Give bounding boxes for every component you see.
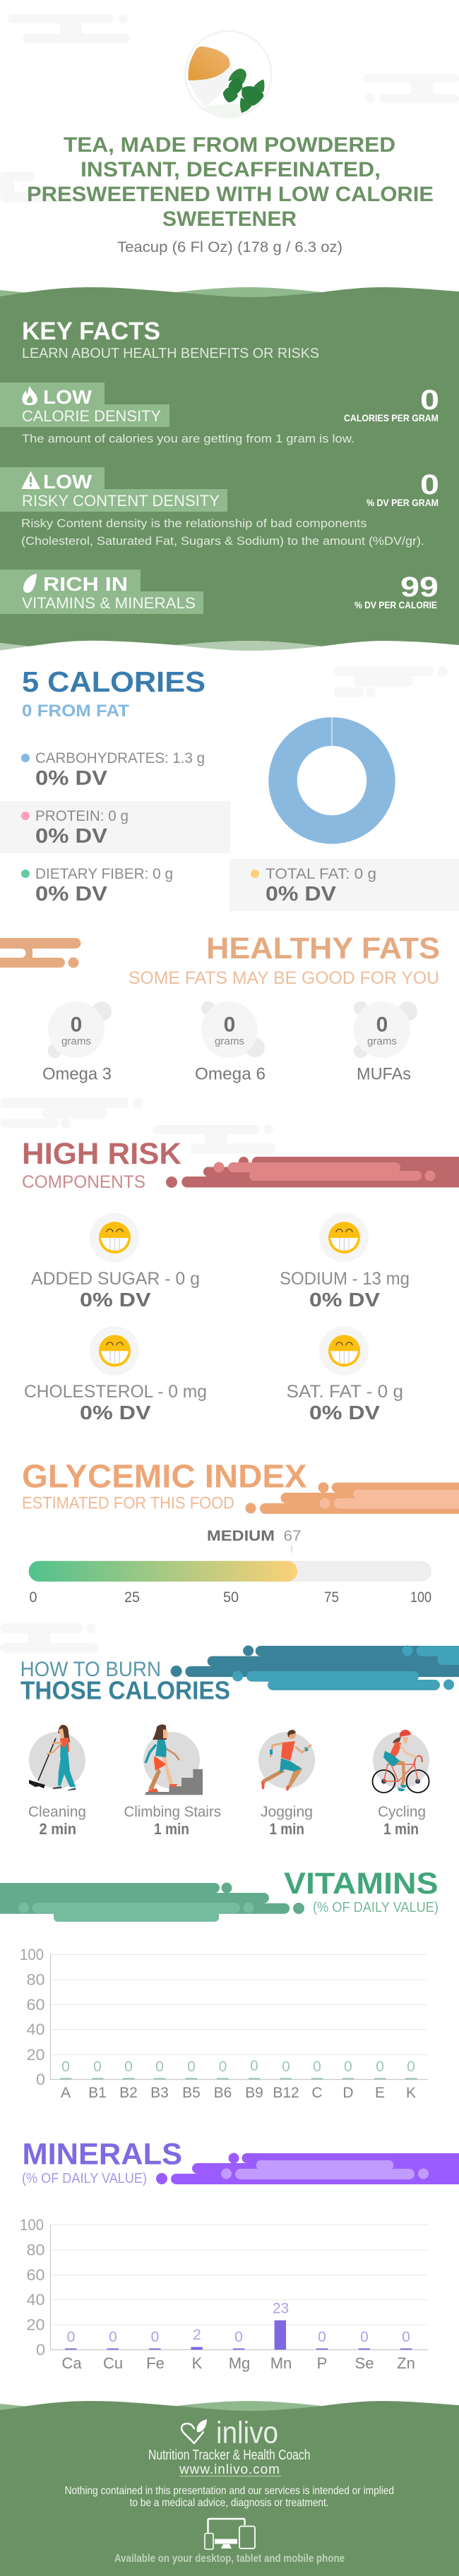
- minerals heading: [22, 2138, 459, 2186]
- macro: total fat: [230, 859, 459, 911]
- vitamins bar chart: 0: [250, 2058, 258, 2074]
- minerals bar chart: Cu: [103, 2354, 123, 2372]
- healthy fats heading: HEALTHY FATS: [206, 932, 440, 965]
- risk: cholesterol: [24, 1326, 207, 1424]
- minerals heading: (% OF DAILY VALUE): [22, 2171, 147, 2186]
- minerals bar chart: Se: [355, 2354, 374, 2372]
- vitamins heading: (% OF DAILY VALUE): [313, 1900, 439, 1915]
- mufas: [354, 1001, 417, 1084]
- vitamins bar chart: 0: [219, 2059, 227, 2075]
- high risk heading: [22, 1137, 459, 1192]
- activity: climbing stairs: Climbing Stairs: [124, 1804, 221, 1820]
- risky dv per gram value: [366, 469, 439, 508]
- vitamins bar chart: 0: [376, 2059, 384, 2075]
- glycemic index gauge: 50: [223, 1589, 239, 1606]
- key facts heading: KEY FACTS: [22, 318, 160, 345]
- glycemic index gauge: 0: [30, 1589, 37, 1606]
- minerals bar chart: Mn: [270, 2354, 292, 2372]
- vitamins bar chart: 0: [124, 2059, 133, 2075]
- dv per calorie value: % DV PER CALORIE: [354, 599, 437, 610]
- calorie density label: LOW: [43, 386, 93, 408]
- activity: cycling: 1 min: [383, 1820, 419, 1838]
- macro: carbohydrates: [21, 750, 205, 790]
- omega 3: 0: [71, 1013, 82, 1037]
- healthy fats heading: [0, 932, 440, 988]
- healthy fats heading: SOME FATS MAY BE GOOD FOR YOU: [129, 968, 439, 988]
- risk: saturated fat: [287, 1326, 403, 1424]
- title: SWEETENER: [162, 207, 297, 231]
- vitamins bar chart: 0: [282, 2059, 290, 2075]
- activity: climbing stairs: 1 min: [154, 1820, 189, 1838]
- risk: added sugar: 0% DV: [80, 1289, 151, 1311]
- inlivo logo: inlivo: [216, 2416, 278, 2450]
- minerals bar chart: 0: [109, 2329, 117, 2345]
- omega 3: Omega 3: [42, 1065, 112, 1084]
- minerals bar chart: [20, 2216, 428, 2372]
- minerals bar chart: Fe: [146, 2354, 165, 2372]
- glycemic index heading: ESTIMATED FOR THIS FOOD: [22, 1494, 234, 1513]
- burn calories heading: [20, 1646, 459, 1705]
- omega 6: Omega 6: [195, 1065, 266, 1084]
- calories heading: 0 FROM FAT: [22, 702, 129, 721]
- risk: sodium: SODIUM - 13 mg: [280, 1269, 410, 1289]
- risk: added sugar: ADDED SUGAR - 0 g: [31, 1269, 200, 1289]
- minerals bar chart: 0: [318, 2329, 326, 2345]
- glycemic index gauge: [29, 1528, 431, 1606]
- vitamins bar chart: 0: [407, 2059, 415, 2075]
- calories heading: 5 CALORIES: [22, 666, 205, 698]
- vitamins bar chart: 0: [155, 2059, 164, 2075]
- activity: cleaning: [28, 1725, 86, 1838]
- macro: protein: [0, 801, 230, 853]
- vitamins bar chart: B6: [214, 2085, 232, 2101]
- disclaimer: [65, 2485, 394, 2509]
- risky content text: [21, 517, 424, 548]
- mufas: 0: [376, 1013, 388, 1037]
- omega 6: [195, 1001, 266, 1084]
- risk: cholesterol: 0% DV: [80, 1402, 151, 1424]
- vitamins bar chart: 60: [27, 1996, 45, 2014]
- burn calories heading: HOW TO BURN: [20, 1658, 161, 1681]
- vitamins bar chart: 0: [61, 2059, 70, 2075]
- high risk heading: HIGH RISK: [22, 1137, 181, 1171]
- vitamins bar chart: A: [61, 2085, 71, 2101]
- calories per gram value: [344, 385, 439, 423]
- vitamins and minerals label: RICH IN: [43, 573, 128, 595]
- calories per gram value: 0: [420, 385, 439, 416]
- macro: carbohydrates: 0% DV: [35, 767, 108, 790]
- disclaimer: to be a medical advice, diagnosis or treatment.: [130, 2497, 329, 2509]
- vitamins bar chart: 80: [27, 1970, 45, 1989]
- minerals bar chart: 60: [27, 2266, 45, 2284]
- minerals bar chart: 100: [20, 2216, 44, 2234]
- vitamins bar chart: 0: [36, 2071, 45, 2088]
- macro: total fat: 0% DV: [266, 883, 337, 905]
- risky content density label: [0, 467, 227, 512]
- omega 3: grams: [61, 1035, 91, 1047]
- risky content density label: LOW: [43, 471, 93, 493]
- serving size: Teacup (6 Fl Oz) (178 g / 6.3 oz): [117, 239, 342, 255]
- activity: cleaning: 2 min: [40, 1820, 76, 1838]
- minerals bar chart: 80: [27, 2241, 45, 2258]
- risky content text: (Cholesterol, Saturated Fat, Sugars & Sodium) to the amount (%DV/gr).: [21, 534, 424, 548]
- risk: saturated fat: SAT. FAT - 0 g: [287, 1382, 403, 1402]
- vitamins heading: VITAMINS: [284, 1867, 439, 1901]
- minerals bar chart: Ca: [61, 2354, 82, 2372]
- calorie density label: CALORIE DENSITY: [22, 407, 161, 425]
- activity: cleaning: Cleaning: [28, 1804, 86, 1820]
- risk: saturated fat: 0% DV: [309, 1402, 380, 1424]
- macro: total fat: TOTAL FAT: 0 g: [266, 866, 376, 882]
- vitamins bar chart: 0: [313, 2059, 321, 2075]
- vitamins bar chart: 0: [93, 2059, 102, 2075]
- minerals bar chart: 2: [193, 2327, 201, 2343]
- macro: protein: 0% DV: [35, 825, 108, 848]
- minerals bar chart: 23: [273, 2301, 289, 2317]
- panel: key facts: [0, 287, 459, 651]
- glycemic index gauge: 75: [324, 1589, 339, 1606]
- mufas: grams: [367, 1035, 397, 1047]
- vitamins bar chart: B3: [150, 2085, 169, 2101]
- vitamins bar chart: B12: [273, 2085, 299, 2101]
- title: INSTANT, DECAFFEINATED,: [81, 158, 381, 181]
- vitamins bar chart: B2: [119, 2085, 138, 2101]
- title: [27, 133, 434, 231]
- calories per gram value: CALORIES PER GRAM: [344, 412, 439, 423]
- minerals bar chart: K: [192, 2354, 203, 2372]
- vitamins and minerals label: VITAMINS & MINERALS: [22, 594, 196, 612]
- minerals bar chart: Mg: [229, 2354, 250, 2372]
- website link: www.inlivo.com: [179, 2462, 280, 2477]
- high risk heading: COMPONENTS: [22, 1172, 145, 1192]
- minerals bar chart: 0: [36, 2341, 45, 2359]
- vitamins heading: [0, 1867, 439, 1922]
- vitamins bar chart: B1: [88, 2085, 107, 2101]
- minerals bar chart: Zn: [397, 2354, 415, 2372]
- dv per calorie value: 99: [400, 572, 439, 603]
- risk: sodium: 0% DV: [309, 1289, 380, 1311]
- minerals bar chart: 0: [67, 2329, 75, 2345]
- key facts subheading: LEARN ABOUT HEALTH BENEFITS OR RISKS: [22, 346, 319, 361]
- burn calories heading: THOSE CALORIES: [20, 1676, 230, 1705]
- risky dv per gram value: 0: [420, 469, 439, 500]
- calories heading: [22, 666, 205, 721]
- vitamins bar chart: B9: [245, 2085, 263, 2101]
- omega 6: 0: [224, 1013, 235, 1037]
- glycemic index gauge: 67: [284, 1528, 301, 1544]
- vitamins bar chart: 0: [187, 2059, 196, 2075]
- risky content density label: RISKY CONTENT DENSITY: [22, 492, 220, 510]
- icon: devices: [205, 2519, 255, 2549]
- tagline: Nutrition Tracker & Health Coach: [148, 2448, 311, 2463]
- risk: added sugar: [31, 1213, 200, 1311]
- minerals heading: MINERALS: [23, 2138, 182, 2172]
- glycemic index heading: [22, 1458, 459, 1514]
- vitamins bar chart: D: [342, 2085, 354, 2101]
- calorie density label: [0, 383, 169, 427]
- vitamins bar chart: E: [375, 2085, 385, 2101]
- macro: dietary fiber: [21, 866, 173, 905]
- vitamins bar chart: 0: [344, 2059, 352, 2075]
- macro: protein: PROTEIN: 0 g: [35, 808, 129, 824]
- vitamins and minerals label: [0, 570, 203, 614]
- vitamins bar chart: B5: [182, 2085, 201, 2101]
- vitamins bar chart: K: [406, 2085, 416, 2101]
- omega 3: [42, 1001, 112, 1084]
- vitamins bar chart: 100: [20, 1946, 44, 1963]
- minerals bar chart: 0: [234, 2329, 243, 2345]
- vitamins bar chart: [20, 1946, 428, 2101]
- food photo: tea cup with mint: [185, 31, 271, 119]
- minerals bar chart: 20: [27, 2316, 45, 2333]
- disclaimer: Nothing contained in this presentation and our services is intended or implied: [65, 2485, 394, 2497]
- vitamins bar chart: C: [311, 2085, 323, 2101]
- glycemic index heading: GLYCEMIC INDEX: [22, 1458, 307, 1495]
- activity: jogging: 1 min: [270, 1820, 304, 1838]
- inlivo logo: [181, 2416, 278, 2450]
- macro: dietary fiber: DIETARY FIBER: 0 g: [35, 866, 173, 882]
- activity: jogging: [258, 1730, 315, 1838]
- macro: dietary fiber: 0% DV: [35, 883, 108, 905]
- activity: jogging: Jogging: [261, 1804, 313, 1820]
- risk: sodium: [280, 1213, 410, 1311]
- risky content text: Risky Content density is the relationship of bad components: [21, 517, 367, 530]
- donut chart: [282, 717, 381, 830]
- activity: climbing stairs: [124, 1724, 221, 1838]
- minerals bar chart: 40: [27, 2291, 45, 2309]
- macro: carbohydrates: CARBOHYDRATES: 1.3 g: [35, 750, 205, 766]
- minerals bar chart: 0: [151, 2329, 159, 2345]
- minerals bar chart: 0: [402, 2329, 410, 2345]
- risky dv per gram value: % DV PER GRAM: [366, 497, 439, 508]
- minerals bar chart: 0: [360, 2329, 369, 2345]
- title: TEA, MADE FROM POWDERED: [64, 133, 395, 157]
- availability note: Available on your desktop, tablet and mobile phone: [114, 2553, 345, 2565]
- vitamins bar chart: 40: [27, 2021, 45, 2038]
- glycemic index gauge: 100: [410, 1589, 431, 1606]
- dv per calorie value: [354, 572, 439, 610]
- title: PRESWEETENED WITH LOW CALORIE: [27, 183, 434, 206]
- omega 6: grams: [215, 1035, 244, 1047]
- activity: cycling: [373, 1730, 429, 1838]
- minerals bar chart: P: [317, 2354, 327, 2372]
- calorie density text: The amount of calories you are getting from 1 gram is low.: [22, 432, 354, 445]
- mufas: MUFAs: [357, 1065, 411, 1084]
- vitamins bar chart: 20: [27, 2046, 45, 2064]
- risk: cholesterol: CHOLESTEROL - 0 mg: [24, 1382, 207, 1402]
- activity: cycling: Cycling: [378, 1804, 426, 1820]
- glycemic index gauge: 25: [124, 1589, 140, 1606]
- glycemic index gauge: MEDIUM: [207, 1528, 275, 1544]
- panel: footer: [0, 2401, 459, 2576]
